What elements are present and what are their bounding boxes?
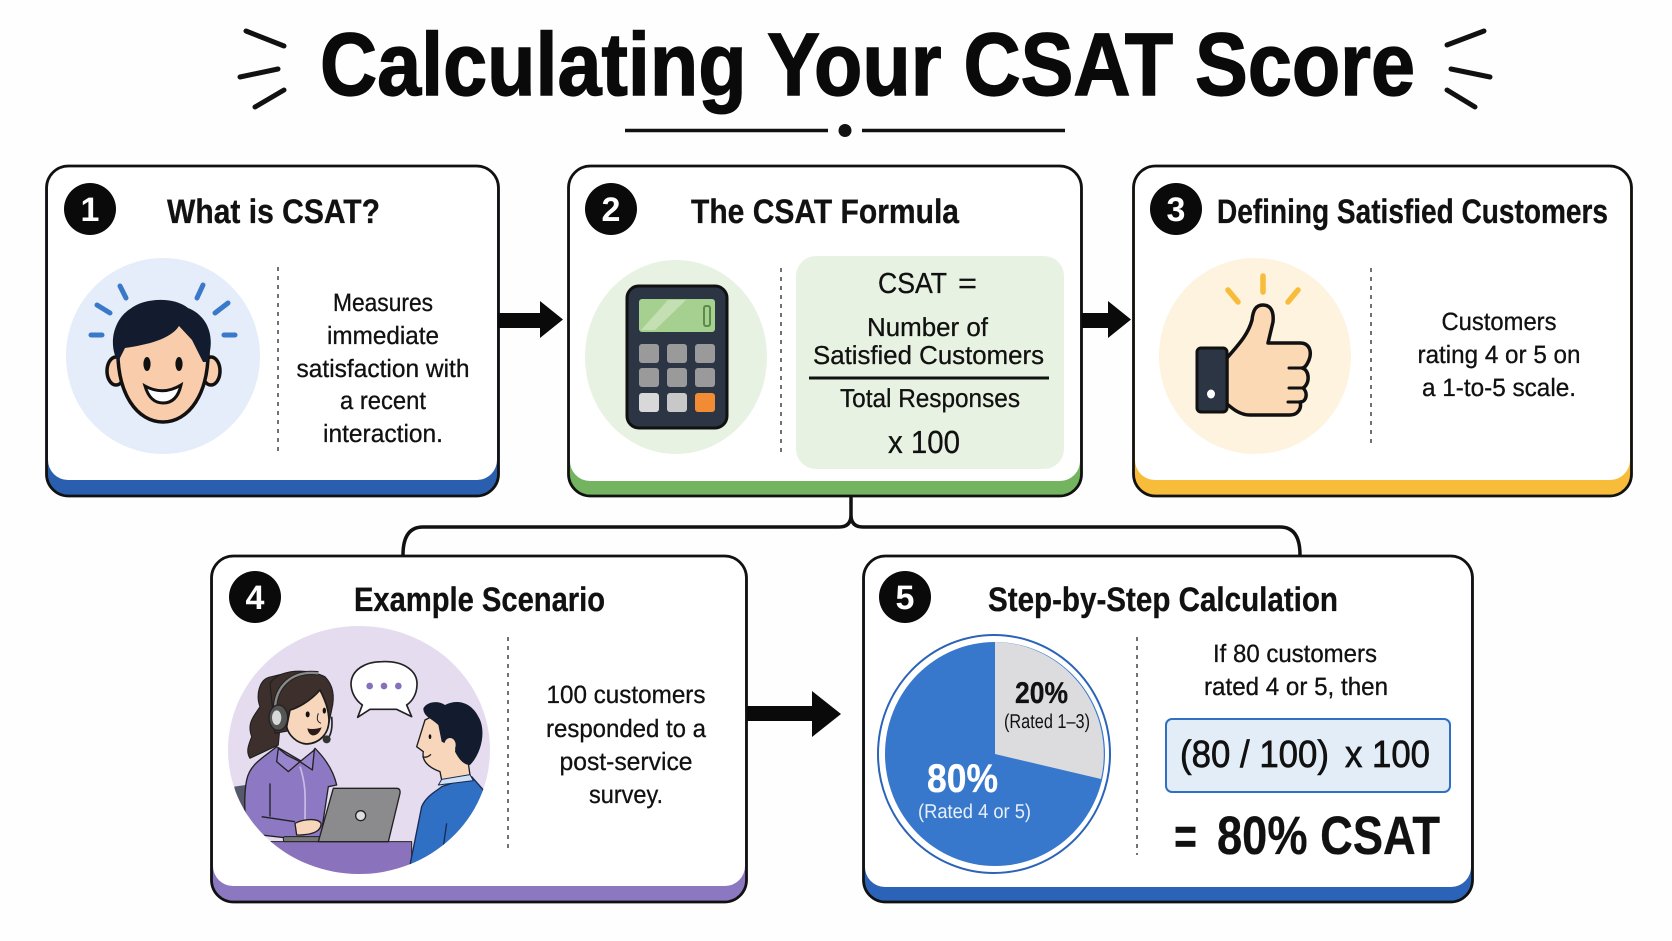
calculation box: (80 / 100) bbox=[1180, 734, 1329, 776]
panel 3: defining satisfied customers bbox=[1133, 166, 1632, 496]
formula box: Number of bbox=[867, 312, 989, 342]
label 80%: (Rated 4 or 5) bbox=[918, 801, 1031, 823]
text: definition: immediate bbox=[327, 322, 439, 350]
text: survey scenario bbox=[546, 681, 706, 809]
formula box: x 100 bbox=[888, 424, 960, 460]
badge 4 bbox=[229, 571, 281, 623]
panel 4: example scenario bbox=[211, 556, 747, 902]
heading 4: Example Scenario bbox=[354, 581, 605, 619]
heading 5: Step-by-Step Calculation bbox=[988, 581, 1338, 619]
formula box bbox=[796, 256, 1064, 469]
text: satisfied definition: Customers bbox=[1442, 308, 1556, 336]
badge 2 bbox=[585, 183, 637, 235]
illustration: agent and customer conversation bbox=[225, 626, 490, 882]
badge 5 bbox=[879, 571, 931, 623]
icon: happy customer face bbox=[66, 258, 260, 454]
result: = bbox=[1174, 808, 1197, 866]
formula box: = bbox=[958, 268, 977, 300]
badge 1 bbox=[64, 183, 116, 235]
text: definition: Measures bbox=[333, 289, 433, 317]
badge 3 bbox=[1150, 183, 1202, 235]
label 20%: (Rated 1–3) bbox=[1004, 711, 1090, 733]
label 80%: 80% bbox=[927, 757, 998, 801]
icon: right title sparkle bbox=[1447, 31, 1490, 107]
text: definition: a recent bbox=[340, 387, 426, 415]
text: satisfied definition bbox=[1418, 308, 1580, 402]
formula box: Total Responses bbox=[840, 383, 1020, 413]
arrow 2 to 3 bbox=[1082, 301, 1131, 338]
arrow 1 to 2 bbox=[498, 301, 563, 338]
label 20% bbox=[1004, 677, 1090, 733]
title divider bbox=[625, 124, 1065, 137]
text: satisfied definition: rating 4 or 5 on bbox=[1418, 341, 1580, 369]
text: definition: interaction. bbox=[323, 420, 443, 448]
calculation box bbox=[1166, 719, 1450, 792]
pie chart: 80 / 20 bbox=[878, 635, 1110, 873]
text: survey scenario: post-service bbox=[560, 748, 692, 776]
heading 2: The CSAT Formula bbox=[691, 193, 960, 231]
panel 2: formula bbox=[568, 166, 1082, 496]
connector: panel 2 to panels 4 and 5 bbox=[403, 496, 1300, 555]
label 20%: 20% bbox=[1015, 677, 1068, 710]
title: Calculating Your CSAT Score bbox=[320, 14, 1415, 114]
heading 1: What is CSAT? bbox=[167, 193, 380, 231]
formula box: CSAT bbox=[878, 268, 947, 300]
text: survey scenario: responded to a bbox=[546, 715, 706, 743]
icon: thumbs up bbox=[1159, 258, 1351, 454]
result: 80% CSAT bbox=[1217, 806, 1440, 866]
text: satisfied definition: a 1-to-5 scale. bbox=[1422, 374, 1576, 402]
icon: left title sparkle bbox=[240, 31, 284, 107]
badge 1: 1 bbox=[81, 191, 99, 229]
calculation box: x 100 bbox=[1345, 734, 1430, 776]
badge 4: 4 bbox=[246, 579, 265, 617]
badge 2: 2 bbox=[602, 191, 620, 229]
panel 5: step-by-step calculation bbox=[863, 556, 1473, 902]
text: calculation intro: If 80 customers bbox=[1213, 640, 1377, 668]
icon: calculator bbox=[585, 260, 767, 454]
badge 3: 3 bbox=[1167, 191, 1185, 229]
text: survey scenario: survey. bbox=[589, 781, 663, 809]
text: calculation intro: rated 4 or 5, then bbox=[1204, 673, 1388, 701]
text: definition: satisfaction with bbox=[296, 355, 470, 383]
text: definition bbox=[296, 289, 470, 448]
label 80% bbox=[918, 757, 1031, 823]
badge 5: 5 bbox=[896, 579, 914, 617]
arrow 4 to 5 bbox=[747, 691, 841, 737]
text: calculation intro bbox=[1204, 640, 1388, 701]
panel 1: what is CSAT bbox=[46, 166, 499, 496]
text: survey scenario: 100 customers bbox=[546, 681, 706, 709]
formula box: Satisfied Customers bbox=[813, 340, 1044, 370]
